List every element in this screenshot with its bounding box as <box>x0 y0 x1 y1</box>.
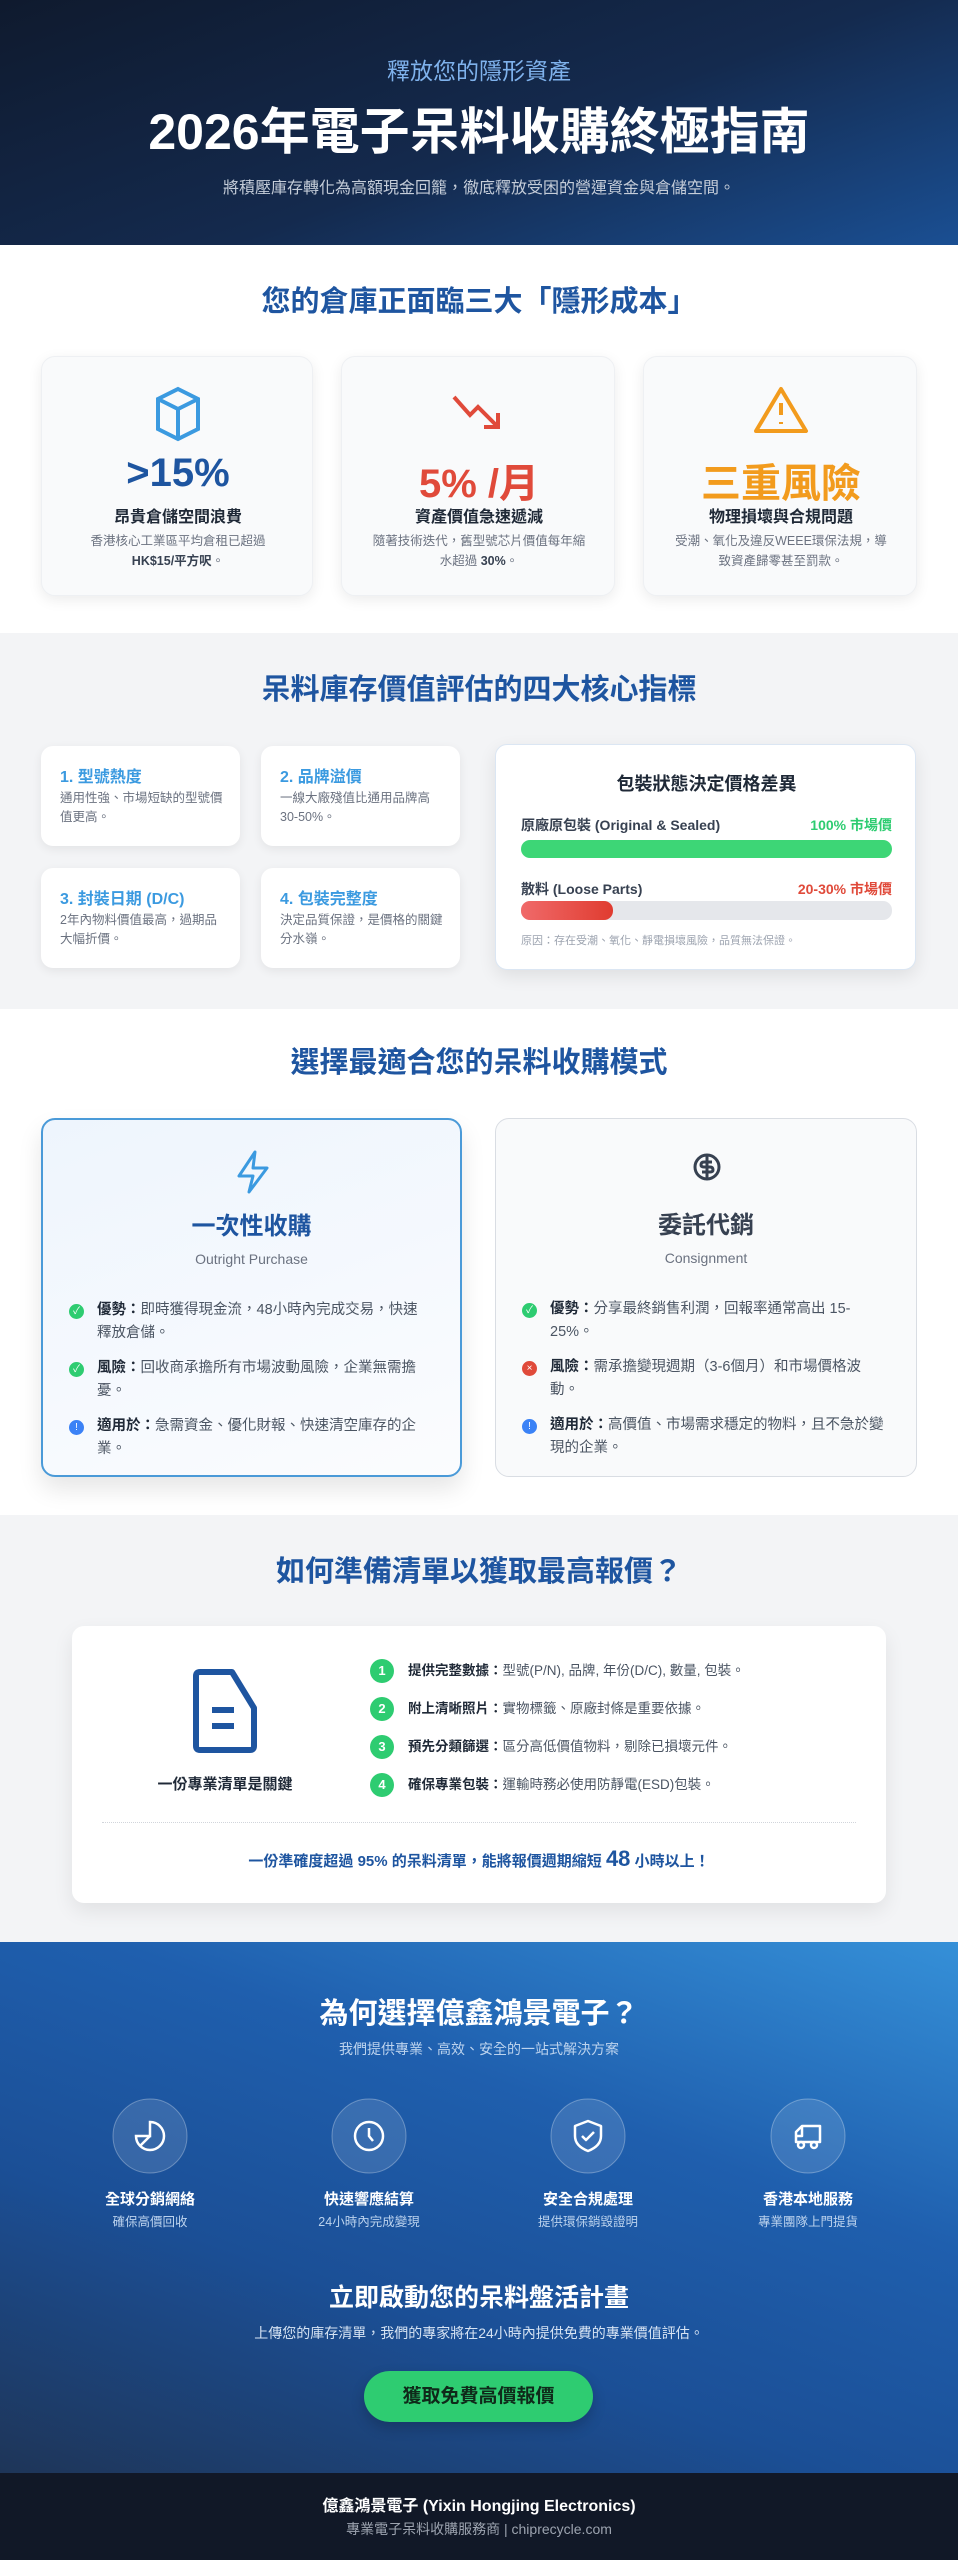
indicator 4: 4. 包裝完整度 <box>280 891 378 908</box>
list: 適用於：高價值、市場需求穩定的物料，且不急於變現的企業。 <box>550 1417 884 1456</box>
feature: fast settlement: 快速響應結算 <box>324 2191 414 2208</box>
card title: 物理損壞與合規問題 <box>709 509 853 526</box>
big number: >15% <box>126 451 230 495</box>
indicator 4: 決定品質保證，是價格的關鍵分水嶺。 <box>280 913 443 946</box>
list: × <box>527 1363 532 1374</box>
desc: 香港核心工業區平均倉租已超過 <box>90 534 266 548</box>
steps: 確保專業包裝：運輸時務必使用防靜電(ESD)包裝。 <box>408 1777 715 1792</box>
desc <box>373 534 585 568</box>
list: ! <box>75 1422 78 1433</box>
indicator 2: 2. 品牌溢價 <box>280 769 362 786</box>
CTA heading: 立即啟動您的呆料盤活計畫 <box>329 2284 629 2312</box>
desc: 水超過 30%。 <box>440 554 518 568</box>
card title: 資產價值急速遞減 <box>415 509 543 526</box>
heading: 選擇最適合您的呆料收購模式 <box>290 1047 668 1079</box>
card: depreciation <box>341 356 615 596</box>
panel: checklist card <box>72 1626 886 1903</box>
icon: lightning <box>237 1150 269 1194</box>
indicator 2 <box>261 746 460 846</box>
footer: 億鑫鴻景電子 (Yixin Hongjing Electronics) <box>322 2498 636 2515</box>
header <box>0 0 958 245</box>
steps: 3 <box>378 1739 386 1754</box>
list: 優勢：即時獲得現金流，48小時內完成交易，快速釋放倉儲。 <box>97 1302 418 1341</box>
feature: global network: 全球分銷網絡 <box>105 2191 195 2208</box>
title: 2026年電子呆料收購終極指南 <box>148 104 810 160</box>
feature: compliance: 提供環保銷毀證明 <box>538 2215 638 2229</box>
heading: 如何準備清單以獲取最高報價？ <box>276 1556 682 1588</box>
section: purchase models <box>0 1009 958 1515</box>
tagline: 將積壓庫存轉化為高額現金回籠，徹底釋放受困的營運資金與倉儲空間。 <box>223 180 735 197</box>
desc: 受潮、氧化及違反WEEE環保法規，導 <box>675 534 887 548</box>
header kicker: 釋放您的隱形資產 <box>387 58 571 84</box>
footer <box>0 2473 958 2560</box>
chart title: 包裝狀態決定價格差異 <box>616 774 796 794</box>
indicator 3: 2年內物料價值最高，過期品大幅折價。 <box>60 913 217 946</box>
indicator 1 <box>41 746 240 846</box>
card: outright purchase: Outright Purchase <box>195 1251 308 1267</box>
steps: 1 <box>378 1663 386 1678</box>
steps <box>370 1659 745 1797</box>
list: 風險：需承擔變現週期（3-6個月）和市場價格波動。 <box>550 1359 861 1398</box>
icon label: 一份專業清單是關鍵 <box>157 1776 292 1793</box>
icon: warning <box>754 386 808 433</box>
bar: loose <box>521 881 892 920</box>
steps: 2 <box>378 1701 386 1716</box>
CTA button: 獲取免費高價報價 <box>402 2386 554 2407</box>
list: 適用於：急需資金、優化財報、快速清空庫存的企業。 <box>97 1418 416 1457</box>
steps: 提供完整數據：型號(P/N), 品牌, 年份(D/C), 數量, 包裝。 <box>408 1663 745 1678</box>
CTA text: 上傳您的庫存清單，我們的專家將在24小時內提供免費的專業價值評估。 <box>254 2325 704 2341</box>
indicator 1: 1. 型號熱度 <box>60 769 142 786</box>
section: why choose us: 我們提供專業、高效、安全的一站式解決方案 <box>339 2041 619 2057</box>
card: storage <box>41 356 313 596</box>
icon: document <box>193 1669 257 1753</box>
feature: local service: 專業團隊上門提貨 <box>758 2215 858 2229</box>
card: consignment: 委託代銷 <box>658 1212 754 1239</box>
indicator 4 <box>261 868 460 968</box>
big number: 三重風險 <box>701 462 861 506</box>
feature: local service: 香港本地服務 <box>763 2191 853 2208</box>
steps: 附上清晰照片：實物標籤、原廠封條是重要依據。 <box>408 1701 705 1716</box>
list <box>69 1301 418 1457</box>
heading: 為何選擇億鑫鴻景電子？ <box>319 1998 638 2030</box>
list <box>522 1300 884 1456</box>
bar: original <box>521 817 892 858</box>
panel: packaging price chart <box>495 744 916 970</box>
desc <box>90 534 266 568</box>
list: 優勢：分享最終銷售利潤，回報率通常高出 15-25%。 <box>550 1301 850 1340</box>
card: risk <box>643 356 917 596</box>
bar: loose: 散料 (Loose Parts) <box>521 881 642 897</box>
card: outright purchase <box>41 1118 462 1477</box>
icon: trend down <box>452 396 500 429</box>
feature: local service <box>758 2098 858 2229</box>
list: ✓ <box>526 1305 533 1316</box>
heading: 呆料庫存價值評估的四大核心指標 <box>261 674 696 706</box>
desc <box>675 534 887 568</box>
card: consignment <box>495 1118 917 1477</box>
feature: global network <box>105 2098 195 2229</box>
desc: 致資產歸零甚至罰款。 <box>718 554 844 568</box>
summary callout: 一份準確度超過 95% 的呆料清單，能將報價週期縮短 48 小時以上！ <box>248 1846 710 1871</box>
indicator 3: 3. 封裝日期 (D/C) <box>60 891 184 908</box>
steps: 預先分類篩選：區分高低價值物料，剔除已損壞元件。 <box>408 1739 732 1754</box>
list: 風險：回收商承擔所有市場波動風險，企業無需擔憂。 <box>97 1360 416 1399</box>
icon: coin <box>694 1154 720 1180</box>
indicator 3 <box>41 868 240 968</box>
section: why choose us <box>0 1942 958 2473</box>
feature: fast settlement: 24小時內完成變現 <box>318 2215 420 2229</box>
section: hidden costs <box>0 245 958 633</box>
bar: original: 原廠原包裝 (Original & Sealed) <box>521 817 720 833</box>
icon: box <box>156 386 200 442</box>
section: prepare list <box>0 1515 958 1942</box>
footer: 專業電子呆料收購服務商 | chiprecycle.com <box>346 2521 612 2537</box>
card title: 昂貴倉儲空間浪費 <box>114 509 242 526</box>
list: ! <box>528 1421 531 1432</box>
list: ✓ <box>73 1306 80 1317</box>
feature: fast settlement <box>318 2098 420 2229</box>
bar: original: 100% 市場價 <box>810 817 892 833</box>
desc: 隨著技術迭代，舊型號芯片價值每年縮 <box>373 534 585 548</box>
list: ✓ <box>73 1364 80 1375</box>
card: consignment: Consignment <box>665 1250 747 1266</box>
note: 原因：存在受潮、氧化、靜電損壞風險，品質無法保證。 <box>521 935 796 947</box>
card: outright purchase: 一次性收購 <box>192 1213 312 1240</box>
bar: loose: 20-30% 市場價 <box>798 881 892 897</box>
feature: global network: 確保高價回收 <box>112 2215 188 2229</box>
indicator 1: 通用性強、市場短缺的型號價值更高。 <box>60 791 223 824</box>
steps: 4 <box>378 1777 386 1792</box>
desc: HK$15/平方呎。 <box>132 554 224 568</box>
indicator 2: 一線大廠殘值比通用品牌高 30-50%。 <box>280 791 430 824</box>
section: four indicators <box>0 633 958 1009</box>
CTA button <box>364 2371 593 2422</box>
big number: 5% /月 <box>419 462 539 506</box>
heading: 您的倉庫正面臨三大「隱形成本」 <box>261 286 696 318</box>
feature: compliance: 安全合規處理 <box>543 2191 633 2208</box>
feature: compliance <box>538 2098 638 2229</box>
